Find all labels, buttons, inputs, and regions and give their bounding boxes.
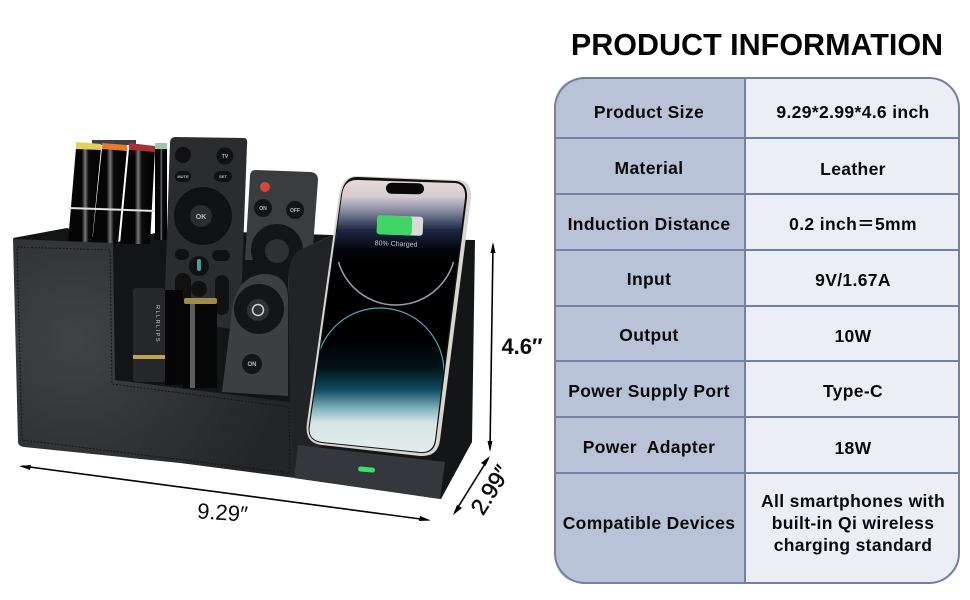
row: input: 9V/1.67A xyxy=(815,270,891,290)
row: compatible devices: charging standard xyxy=(774,535,932,555)
remote control: round dial: ON xyxy=(248,362,256,368)
product photo: desk organizer with wireless charger xyxy=(13,137,475,499)
row: induction distance xyxy=(568,214,917,234)
row: power supply port: Type-C xyxy=(823,381,883,401)
remote control: small: OFF xyxy=(290,208,300,214)
organizer front panel xyxy=(13,239,295,478)
row: induction distance: Induction Distance xyxy=(568,214,730,234)
table left column background xyxy=(555,78,745,583)
back inner wall xyxy=(13,228,333,405)
icon: marker pens xyxy=(68,140,167,244)
remote control: tall: SET xyxy=(219,174,227,179)
organizer divider wall xyxy=(288,235,345,478)
icon: battery xyxy=(377,215,423,236)
row: power adapter xyxy=(583,437,872,458)
title: PRODUCT INFORMATION xyxy=(571,28,943,62)
row: power supply port xyxy=(568,381,883,401)
table right column background xyxy=(745,78,959,583)
charging base xyxy=(294,445,445,499)
row: material xyxy=(615,158,886,179)
row: output xyxy=(619,325,872,346)
remote control: small: ON xyxy=(259,206,267,212)
organizer right back support xyxy=(288,238,475,499)
remote control: tall: MUTE xyxy=(177,174,189,179)
icon: green charging light xyxy=(358,466,375,473)
remote control: small xyxy=(245,170,318,276)
label: width: 9.29″ xyxy=(196,498,249,527)
row: compatible devices: All smartphones with xyxy=(761,491,945,511)
arrow: width dimension 9.29 inch xyxy=(19,465,431,521)
cosmetic tubes xyxy=(133,288,217,388)
arrow: depth dimension 2.99 inch xyxy=(453,456,490,515)
label: depth: 2.99″ xyxy=(465,460,515,519)
remote control: tall: OK xyxy=(196,214,206,221)
label: height: 4.6″ xyxy=(501,334,543,359)
row: input: Input xyxy=(627,269,671,289)
row: material: Material xyxy=(615,158,683,178)
row: compatible devices xyxy=(563,491,945,555)
row: power adapter: 18W xyxy=(834,438,872,458)
smartphone xyxy=(300,176,475,462)
panel: specification table xyxy=(555,78,959,583)
row: product size: 9.29*2.99*4.6 inch xyxy=(776,102,930,122)
row: induction distance: 0.2 inch＝5mm xyxy=(789,214,917,234)
row: product size xyxy=(594,102,930,122)
lower circle and glow xyxy=(310,307,444,452)
remote control: tall: TV xyxy=(222,154,229,160)
phone camera cutout xyxy=(386,183,424,194)
battery status text: 80% Charged xyxy=(375,240,418,249)
row: output: 10W xyxy=(834,326,872,346)
cosmetic tubes: RLLRLIPS xyxy=(154,305,160,343)
row: power supply port: Power Supply Port xyxy=(568,381,730,401)
row: output: Output xyxy=(619,325,679,345)
arrow: height dimension 4.6 inch xyxy=(488,242,496,452)
row: material: Leather xyxy=(820,159,886,179)
row: input xyxy=(627,269,891,290)
row: power adapter: Power Adapter xyxy=(583,437,715,457)
row: compatible devices: Compatible Devices xyxy=(563,513,735,533)
row: product size: Product Size xyxy=(594,102,704,122)
remote control: round dial xyxy=(222,274,288,396)
remote control: tall xyxy=(164,137,247,330)
row: compatible devices: built-in Qi wireless xyxy=(772,513,934,533)
upper circle xyxy=(335,229,454,306)
